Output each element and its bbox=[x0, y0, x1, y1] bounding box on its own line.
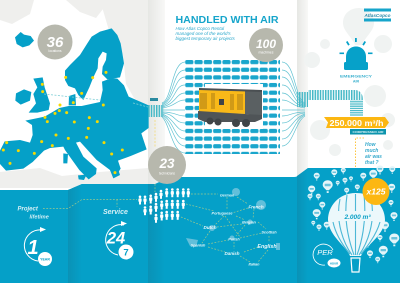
language labels: Polish bbox=[228, 238, 240, 242]
right panel faint balloons bbox=[304, 8, 395, 156]
question: how much air: much bbox=[365, 148, 378, 154]
banner: 250.000 m3/h: 250.000 m³/h bbox=[330, 119, 384, 128]
big balloon: 2.000 m³ bbox=[343, 214, 371, 221]
callout: 100 machines bbox=[249, 28, 283, 62]
icon: per hour bbox=[313, 244, 340, 268]
callout: x125: x125 bbox=[366, 186, 386, 196]
text: project lifetime bbox=[18, 206, 49, 220]
tag: compressed air bbox=[350, 129, 386, 134]
icon: per hour: HOUR bbox=[330, 262, 338, 266]
location dots bbox=[2, 71, 124, 174]
language labels: Danish bbox=[224, 251, 240, 256]
question: how much air: that ? bbox=[365, 160, 379, 166]
Britain bbox=[29, 77, 50, 113]
icon: per hour: PER bbox=[317, 248, 333, 257]
language labels: German bbox=[220, 194, 235, 198]
callout: 100 machines: 100 bbox=[256, 37, 276, 51]
intro text bbox=[176, 26, 236, 41]
icons: technicians bbox=[138, 188, 190, 223]
Iceland bbox=[15, 32, 34, 47]
callout: 23 technicians: 23 bbox=[158, 156, 175, 171]
question: how much air bbox=[365, 142, 382, 166]
callout: 36 locations: 36 bbox=[47, 34, 64, 51]
question: how much air: How bbox=[365, 142, 377, 148]
language labels: Scottish bbox=[261, 230, 277, 234]
language labels: Belgian bbox=[242, 220, 257, 224]
text: project lifetime: lifetime bbox=[30, 214, 49, 220]
pipes to flow box bbox=[297, 90, 363, 116]
dotted leader, yellow bbox=[356, 138, 364, 190]
icon: emergency beacon bbox=[340, 38, 372, 70]
callout: x125 bbox=[362, 178, 390, 205]
banner: 250.000 m3/h bbox=[324, 117, 389, 128]
intro text: managed one of the world's bbox=[176, 31, 231, 36]
country flags shapes bbox=[186, 188, 280, 250]
Scandinavia bbox=[65, 28, 124, 100]
callout: 23 technicians bbox=[148, 146, 186, 184]
language labels: French bbox=[248, 204, 264, 210]
mainland bbox=[0, 78, 149, 179]
dotted links in band bbox=[43, 184, 269, 262]
intro text: How Atlas Copco Rental bbox=[176, 26, 225, 31]
icon: 1 year cycle: 1 bbox=[27, 237, 39, 259]
callout: 36 locations bbox=[38, 24, 72, 60]
intro text: biggest temporary air projects bbox=[176, 36, 236, 41]
icon: 24/7 cycle bbox=[106, 221, 134, 260]
Ireland bbox=[15, 89, 31, 105]
icon: 24/7 cycle: 24 bbox=[106, 230, 125, 248]
logo: Atlas Copco: AtlasCopco bbox=[363, 13, 391, 18]
label: emergency air bbox=[340, 74, 373, 84]
text: project lifetime: Project bbox=[18, 206, 39, 212]
language labels bbox=[191, 194, 277, 266]
icon: 1 year cycle: YEAR bbox=[40, 258, 50, 262]
callout: 23 technicians: technicians bbox=[159, 172, 175, 176]
big balloon bbox=[328, 193, 385, 272]
text: service: Service bbox=[103, 209, 128, 216]
label: emergency air: AIR bbox=[353, 80, 360, 84]
logo: Atlas Copco bbox=[363, 8, 391, 22]
language labels: English bbox=[257, 244, 277, 250]
question: how much air: air was bbox=[365, 154, 382, 160]
Denmark bbox=[69, 94, 76, 105]
title: HANDLED WITH AIR bbox=[176, 14, 279, 26]
pipes from map to unit bbox=[148, 98, 164, 117]
background world map, grey bbox=[0, 0, 148, 188]
language labels: Spanish bbox=[191, 244, 206, 248]
Sicily and Sardinia bbox=[63, 153, 68, 163]
small balloons field bbox=[308, 166, 399, 263]
label: emergency air: EMERGENCY bbox=[340, 74, 373, 78]
callout: 100 machines: machines bbox=[259, 50, 274, 54]
dotted links on map bbox=[44, 94, 155, 148]
language labels: Dutch bbox=[203, 225, 217, 230]
Greece bbox=[109, 167, 120, 178]
icon: 24/7 cycle: 7 bbox=[123, 248, 129, 258]
machine grid bbox=[162, 60, 305, 154]
folds bbox=[148, 0, 308, 190]
language labels: Italian bbox=[249, 262, 260, 266]
language labels: Portuguese bbox=[212, 212, 232, 216]
bottom blue band bbox=[0, 168, 400, 283]
tag: compressed air: COMPRESSED AIR bbox=[352, 130, 384, 134]
map of Europe bbox=[0, 28, 149, 180]
icon: 1 year cycle bbox=[24, 227, 52, 266]
compressor unit bbox=[198, 88, 262, 127]
callout: 36 locations: locations bbox=[48, 49, 62, 53]
